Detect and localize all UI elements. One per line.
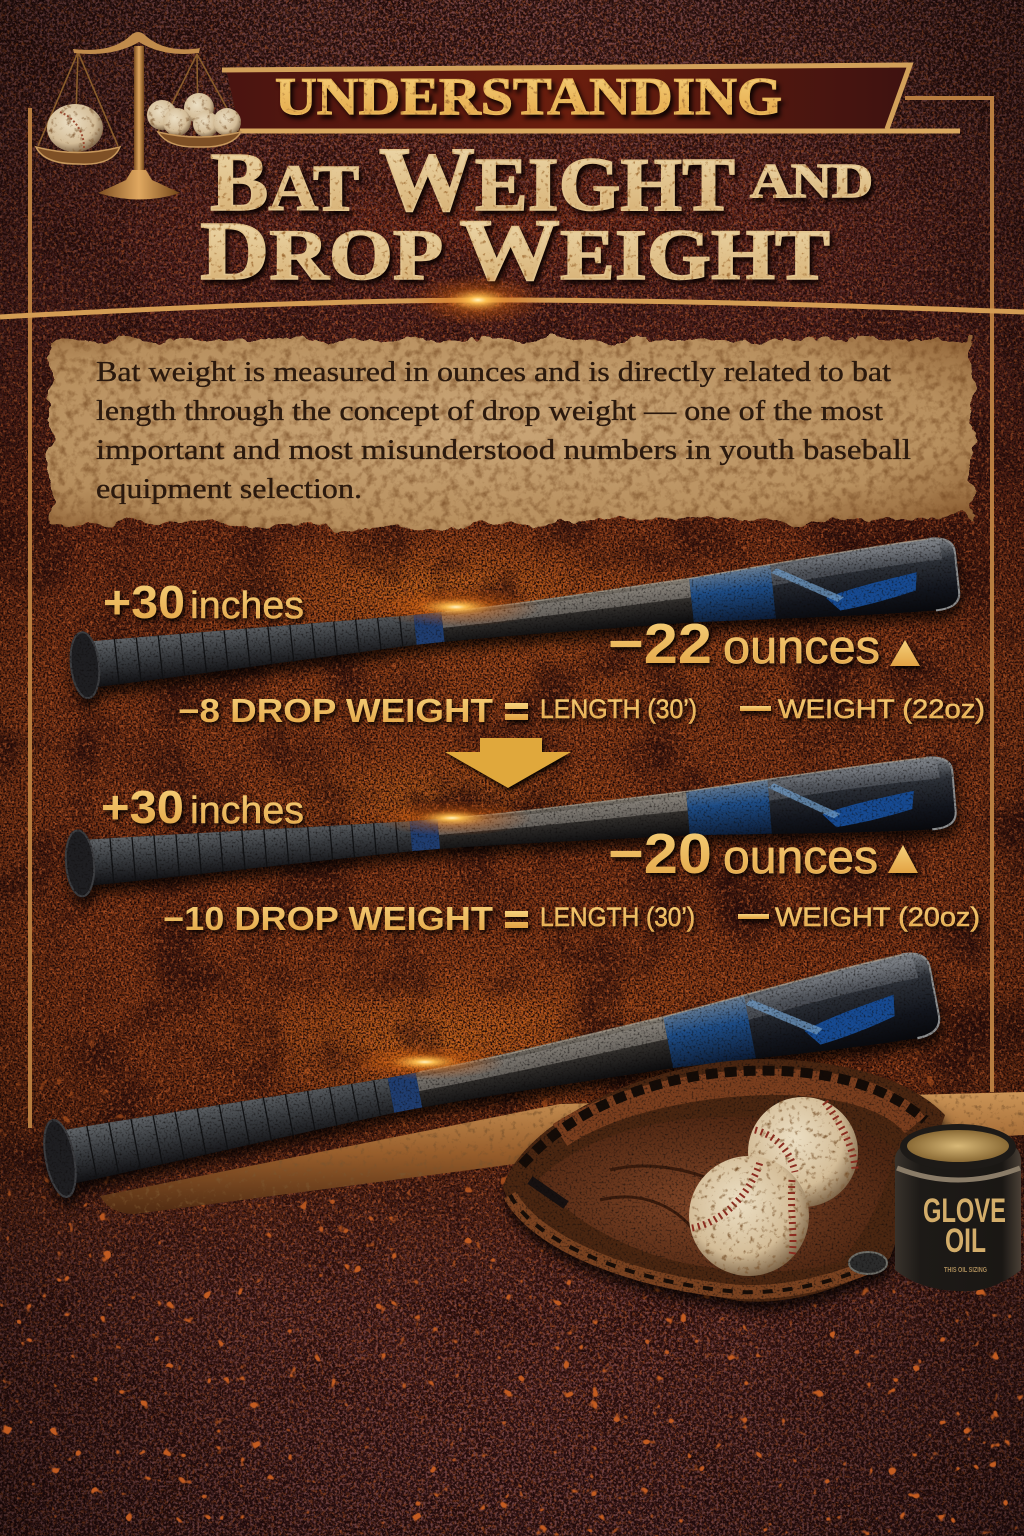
bat 2 length label: inches: [190, 790, 304, 832]
jar label text: THIS OIL SIZING: [944, 1267, 987, 1274]
bat 1: [67, 536, 961, 702]
title: bat weight and drop weight: AND: [750, 153, 873, 208]
drop weight formula: -8: −8 DROP WEIGHT: [178, 692, 493, 729]
bat 2 weight label: ounces: [723, 830, 878, 883]
bat 2 length label: +30: [101, 781, 184, 833]
intro paragraph: [96, 356, 911, 505]
bat 1 flare: [371, 587, 541, 627]
intro paragraph: important and most misunderstood numbers in youth baseball: [96, 434, 911, 466]
intro paragraph: Bat weight is measured in ounces and is directly related to bat: [96, 356, 891, 388]
drop weight formula: -8: [178, 692, 985, 729]
title flare: [408, 274, 548, 326]
title ribbon: [222, 65, 960, 131]
wooden bat: [100, 1092, 1024, 1214]
title: bat weight and drop weight: BAT WEIGHT: [210, 128, 735, 230]
drop weight formula: -10: [163, 900, 980, 937]
bat 1 weight label: −22: [608, 612, 712, 676]
parchment text panel: [50, 340, 972, 530]
intro paragraph: equipment selection.: [96, 473, 362, 505]
jar: glove oil: [895, 1124, 1021, 1291]
arrow down: [445, 738, 571, 788]
drop weight formula: -8: LENGTH (30’): [540, 694, 697, 724]
bat 2 flare: [372, 800, 532, 836]
bat 1 length label: [103, 576, 304, 628]
jar label text: [923, 1192, 1006, 1274]
jar label text: OIL: [945, 1222, 986, 1260]
bat 3: [38, 950, 942, 1203]
bat 2: [63, 756, 957, 900]
gold frame: [0, 98, 1024, 1128]
intro paragraph: length through the concept of drop weight — one of the most: [96, 395, 883, 427]
bat 1 weight label: [608, 612, 920, 676]
drop weight formula: -10: LENGTH (30’): [540, 902, 695, 932]
title: bat weight and drop weight: DROP WEIGHT: [200, 202, 830, 299]
baseball: back: [748, 1097, 858, 1207]
heading: understanding: UNDERSTANDING: [275, 68, 782, 126]
bat 2 weight label: −20: [608, 822, 712, 886]
bat 1 weight label: ounces: [723, 620, 880, 673]
icon: balance scale with baseballs: [36, 32, 241, 200]
bat 2 weight label: [608, 822, 918, 886]
drop weight formula: -10: −10 DROP WEIGHT: [163, 900, 493, 937]
baseball: front: [689, 1156, 809, 1276]
baseball glove: [503, 1059, 945, 1302]
title: bat weight and drop weight: [200, 128, 873, 299]
drop weight formula: -10: WEIGHT (20oz): [775, 902, 980, 932]
bat 1 length label: +30: [103, 576, 185, 628]
bat 1 length label: inches: [190, 585, 304, 627]
drop weight formula: -8: WEIGHT (22oz): [778, 694, 985, 724]
bat 3 flare: [345, 1044, 505, 1080]
bat 2 length label: [101, 781, 304, 833]
